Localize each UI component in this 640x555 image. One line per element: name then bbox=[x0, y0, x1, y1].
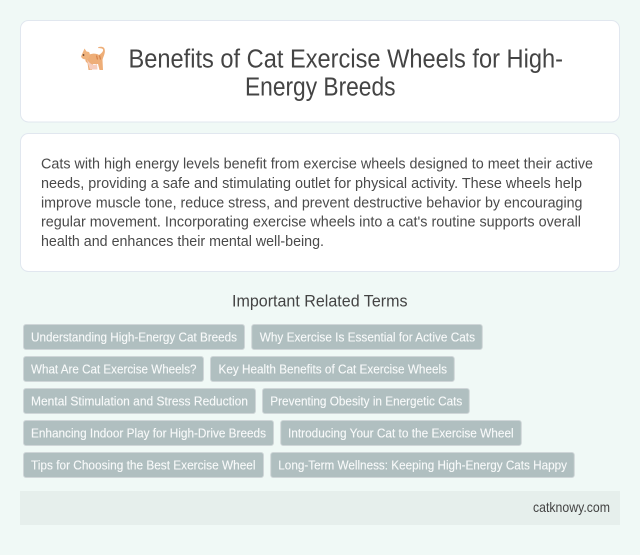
tag: why exercise bbox=[252, 324, 482, 350]
tag: preventing obesity: Preventing Obesity in Energetic Cats bbox=[270, 393, 462, 408]
heading: related terms: Important Related Terms bbox=[232, 292, 408, 311]
tag list bbox=[24, 324, 574, 478]
summary paragraph bbox=[41, 155, 593, 250]
tag: key health benefits: Key Health Benefits of Cat Exercise Wheels bbox=[218, 361, 447, 376]
title: Energy Breeds bbox=[245, 74, 396, 102]
tag: what are wheels: What Are Cat Exercise Wheels? bbox=[31, 361, 196, 376]
tag: why exercise: Why Exercise Is Essential for Active Cats bbox=[260, 329, 475, 344]
tag: introducing bbox=[281, 420, 521, 446]
tag: what are wheels bbox=[24, 356, 204, 382]
tag: key health benefits bbox=[210, 356, 454, 382]
panel: title card bbox=[20, 20, 620, 122]
summary paragraph: regular movement. Incorporating exercise wheels into a cat's routine supports overall bbox=[41, 214, 581, 230]
tag: understanding bbox=[24, 324, 244, 350]
summary paragraph: health and enhances their mental well-being. bbox=[41, 233, 324, 250]
footer bbox=[20, 491, 620, 525]
footer source text: catknowy.com bbox=[533, 500, 610, 515]
summary paragraph: improve muscle tone, reduce stress, and prevent destructive behavior by encouraging bbox=[41, 194, 582, 211]
tag: indoor play bbox=[24, 420, 274, 446]
title: Benefits of Cat Exercise Wheels for High- bbox=[128, 46, 563, 74]
tag: mental stimulation bbox=[24, 388, 256, 414]
panel: summary card bbox=[20, 134, 620, 272]
tag: introducing: Introducing Your Cat to the Exercise Wheel bbox=[288, 425, 514, 440]
tag: mental stimulation: Mental Stimulation and Stress Reduction bbox=[31, 393, 248, 408]
tag: understanding: Understanding High-Energy Cat Breeds bbox=[31, 329, 237, 344]
tag: long-term wellness: Long-Term Wellness: Keeping High-Energy Cats Happy bbox=[278, 457, 568, 472]
tag: long-term wellness bbox=[271, 452, 574, 478]
tag: preventing obesity bbox=[262, 388, 469, 414]
summary paragraph: Cats with high energy levels benefit from exercise wheels designed to meet their active bbox=[41, 155, 593, 172]
summary paragraph: needs, providing a safe and stimulating outlet for physical activity. These wheels help bbox=[41, 175, 582, 192]
tag: indoor play: Enhancing Indoor Play for High-Drive Breeds bbox=[31, 425, 266, 440]
icon: orange cat bbox=[81, 47, 105, 70]
tag: choosing tips bbox=[24, 452, 264, 478]
tag: choosing tips: Tips for Choosing the Best Exercise Wheel bbox=[31, 457, 256, 472]
title bbox=[128, 46, 563, 102]
